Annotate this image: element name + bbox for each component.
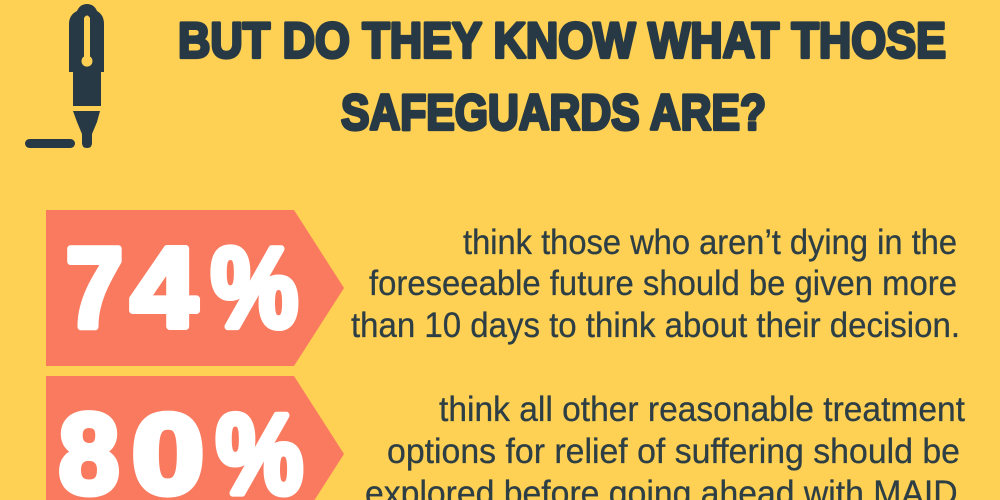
text block: 74% description: [351, 223, 960, 345]
text block: 80% description: options for relief of suffering should be: [387, 432, 960, 471]
text block: 74% description: think those who aren’t dying in the: [463, 223, 957, 262]
panel: 74% statistic: [46, 210, 344, 366]
panel: 74% statistic: %: [211, 224, 298, 350]
panel: 80% statistic: [46, 376, 344, 500]
panel: 74% statistic: 7: [66, 224, 123, 350]
text block: 74% description: foreseeable future should be given more: [369, 264, 957, 303]
text block: 80% description: [365, 390, 967, 500]
icon: pen drawing a line: [25, 4, 104, 148]
text block: 74% description: than 10 days to think about their decision.: [351, 306, 960, 345]
panel: 74% statistic: 4: [131, 224, 197, 350]
title: SAFEGUARDS ARE?: [341, 84, 766, 140]
title: [178, 12, 946, 140]
text block: 80% description: think all other reasonable treatment: [439, 390, 965, 429]
